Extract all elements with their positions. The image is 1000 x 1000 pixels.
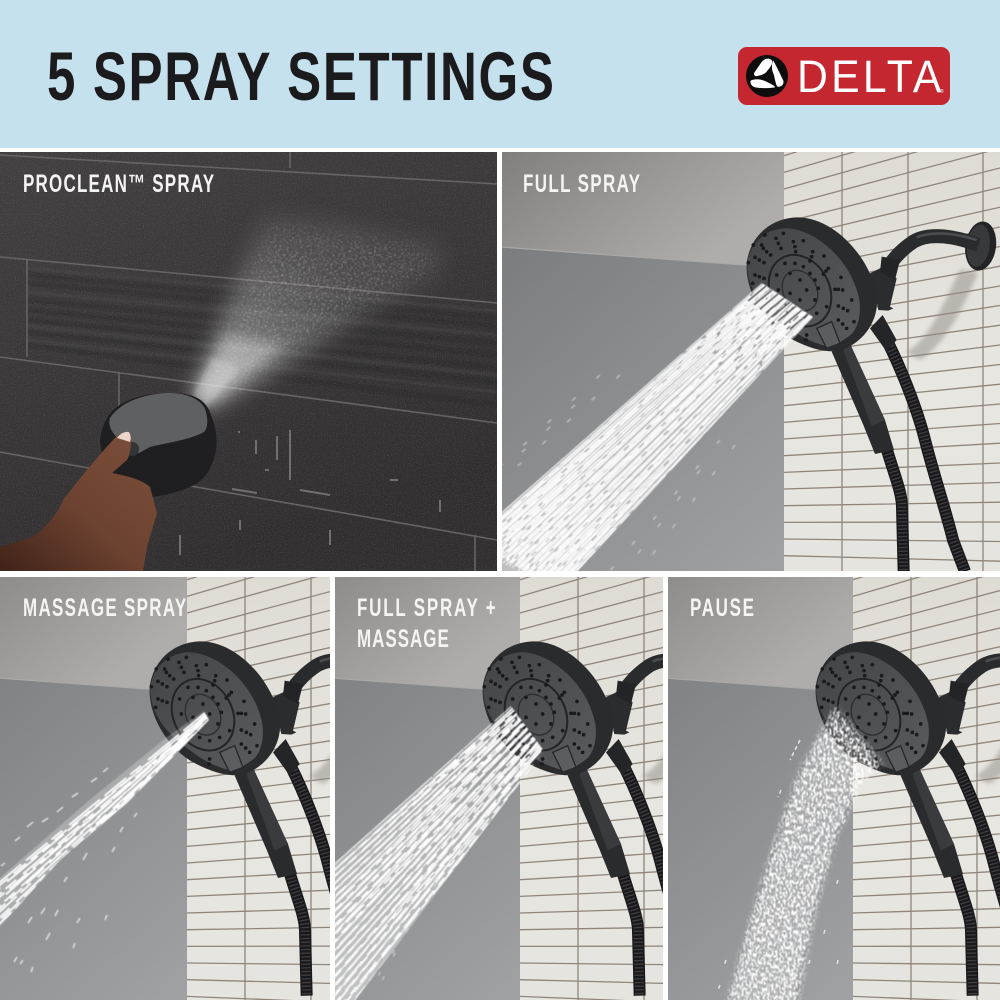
panel: pause	[668, 577, 1000, 1000]
panel: full spray + massage	[335, 577, 663, 1000]
header banner	[0, 0, 1000, 148]
labels: FULL SPRAY +	[357, 594, 496, 622]
shower scene	[668, 577, 1000, 1000]
panel: full spray + massage: MASSAGE	[357, 625, 449, 653]
banded tile	[30, 274, 496, 392]
panel: massage spray	[0, 577, 330, 1000]
label: PROCLEAN™ SPRAY	[23, 170, 214, 198]
title: 5 SPRAY SETTINGS	[47, 37, 554, 115]
label: PAUSE	[690, 594, 754, 622]
water spray	[718, 706, 882, 1000]
water spray	[335, 706, 543, 1000]
handheld shower head	[100, 393, 217, 497]
label: FULL SPRAY	[523, 170, 640, 198]
Delta logo	[738, 47, 950, 105]
Delta logo: DELTA	[797, 52, 942, 102]
water spray	[502, 282, 814, 571]
wall grain	[0, 152, 497, 571]
label: MASSAGE SPRAY	[23, 594, 186, 622]
panel: ProClean spray	[0, 152, 497, 571]
Delta logo: ®	[940, 88, 944, 95]
water spray	[0, 711, 210, 972]
panel: full spray	[502, 152, 1000, 571]
shower scene	[502, 152, 1000, 571]
shower scene	[0, 577, 330, 1000]
spray mist	[192, 215, 447, 410]
shower scene	[335, 577, 663, 1000]
hand pressing button	[0, 432, 157, 571]
